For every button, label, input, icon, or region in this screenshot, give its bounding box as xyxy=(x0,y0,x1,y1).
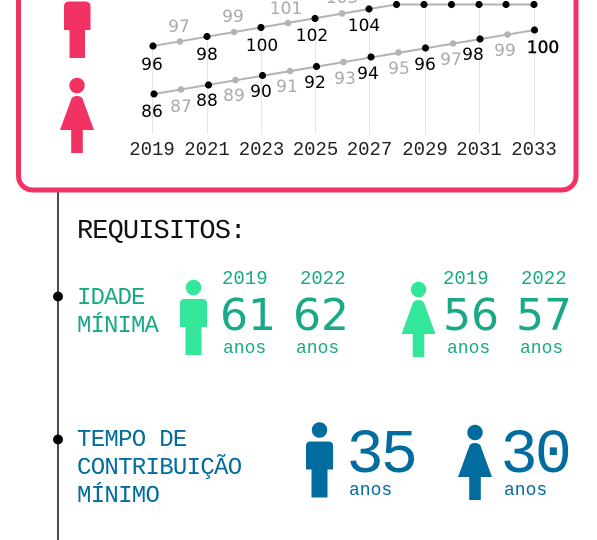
timeline xyxy=(57,188,59,540)
icon: man pink xyxy=(64,2,90,58)
marker: idade minima xyxy=(53,292,63,302)
line chart: 2031 xyxy=(456,139,502,161)
line chart: 93 xyxy=(334,69,356,89)
label: idade minima: MÍNIMA xyxy=(77,312,160,340)
line chart: 2029 xyxy=(402,139,448,161)
values: men 2019: 61 xyxy=(220,290,276,341)
panel: pink frame xyxy=(18,0,576,190)
line chart: 88 xyxy=(196,91,218,111)
line chart: 2033 xyxy=(511,139,557,161)
values: men 2022 xyxy=(293,268,349,359)
line chart: 2019 xyxy=(129,139,175,161)
values: women 2022 xyxy=(516,268,572,359)
marker: tempo de contribuicao xyxy=(53,434,63,444)
values: men 2022: 2022 xyxy=(300,268,346,290)
values: men 2019: 2019 xyxy=(222,268,268,290)
value: women 30: 30 xyxy=(500,420,569,491)
line chart: 90 xyxy=(250,82,272,102)
icon: woman blue xyxy=(458,425,492,500)
values: women 2022: anos xyxy=(520,339,563,359)
values: men 2019: anos xyxy=(223,339,266,359)
line chart: 92 xyxy=(304,73,326,93)
line chart: 91 xyxy=(276,77,298,97)
line chart: 104 xyxy=(348,16,380,36)
label: tempo de contribuicao: MÍNIMO xyxy=(77,482,160,510)
values: men 2022: 62 xyxy=(293,290,349,341)
values: women 2022: 57 xyxy=(516,290,572,341)
line chart: 95 xyxy=(388,59,410,79)
label: tempo de contribuicao: CONTRIBUIÇÃO xyxy=(77,454,242,482)
values: women 2022: 2022 xyxy=(521,268,567,290)
label: idade minima: IDADE xyxy=(77,285,145,312)
value: women 30: anos xyxy=(504,481,547,501)
line chart: 97 xyxy=(168,17,190,37)
line chart xyxy=(129,0,559,161)
line chart: 2021 xyxy=(184,139,230,161)
line chart: 99 xyxy=(222,7,244,27)
line chart: 89 xyxy=(223,86,245,106)
line chart: 94 xyxy=(357,64,379,84)
values: women 2019: 56 xyxy=(443,290,499,341)
line chart: 2025 xyxy=(293,139,338,161)
line chart: 2023 xyxy=(239,139,284,161)
line chart: 100 xyxy=(527,38,559,58)
line chart: 2027 xyxy=(347,139,392,161)
values: men 2019 xyxy=(220,268,276,359)
line chart: 98 xyxy=(196,45,218,65)
line chart: 86 xyxy=(141,102,163,122)
line chart: 96 xyxy=(141,55,163,75)
values: women 2019: anos xyxy=(447,339,490,359)
line chart: 87 xyxy=(170,97,192,117)
icon: man blue xyxy=(306,422,333,498)
line chart: 99 xyxy=(494,41,516,61)
line chart: 97 xyxy=(440,50,462,70)
heading: requisitos: REQUISITOS: xyxy=(77,217,245,247)
icon: woman green xyxy=(402,282,436,357)
icon: man green xyxy=(180,280,207,355)
value: men 35: 35 xyxy=(346,420,415,491)
line chart: 98 xyxy=(462,45,484,65)
value: men 35: anos xyxy=(349,481,392,501)
line chart: 100 xyxy=(246,36,278,56)
label: tempo de contribuicao: TEMPO DE xyxy=(77,427,187,454)
values: women 2019 xyxy=(443,268,499,359)
line chart: 102 xyxy=(296,26,328,46)
line chart: 96 xyxy=(414,55,436,75)
values: men 2022: anos xyxy=(296,339,339,359)
values: women 2019: 2019 xyxy=(443,268,489,290)
icon: woman pink xyxy=(60,78,94,153)
